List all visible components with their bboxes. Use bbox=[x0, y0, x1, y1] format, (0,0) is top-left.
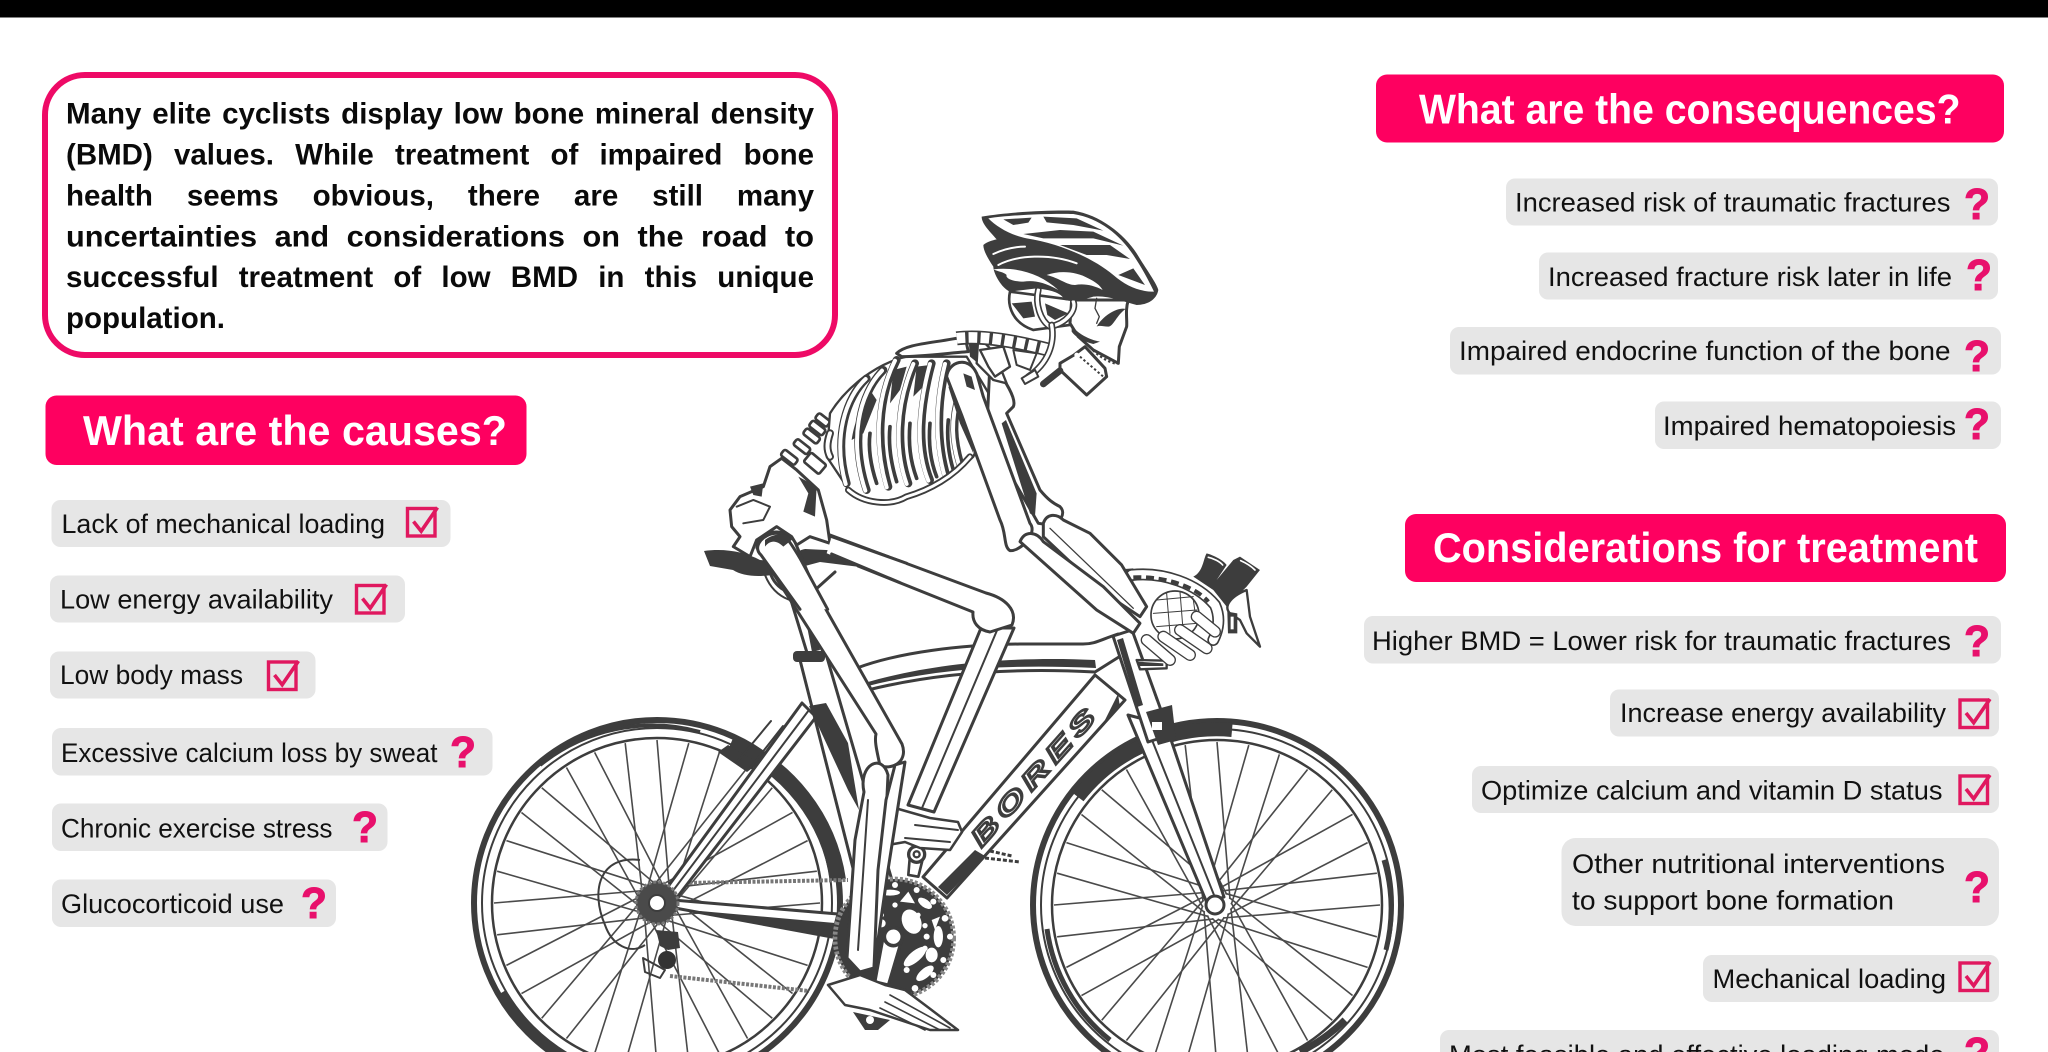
item: fracture risk later in life: ? bbox=[1966, 251, 1992, 300]
item: chronic exercise stress: Chronic exercise stress bbox=[61, 814, 332, 844]
helmet interior bbox=[1009, 292, 1073, 330]
far tibia bbox=[908, 628, 1014, 812]
head tube bbox=[1113, 630, 1170, 742]
top black bar bbox=[0, 0, 2048, 18]
rear wheel bbox=[474, 720, 840, 1052]
chain bbox=[670, 880, 848, 991]
near tibia and fibula bbox=[847, 763, 888, 972]
item: calcium and vitamin D bbox=[1472, 766, 1999, 813]
item: other nutritional interventions bbox=[1562, 838, 1999, 926]
skull bbox=[1060, 298, 1128, 395]
heading: consequences bbox=[1376, 74, 2004, 142]
pedal bbox=[853, 1012, 890, 1030]
far foot bbox=[888, 808, 962, 850]
helmet strap bbox=[1037, 290, 1074, 327]
item: calcium and vitamin D: Optimize calcium and vitamin D status bbox=[1481, 776, 1942, 806]
item: low body mass bbox=[50, 652, 316, 698]
heading: causes: What are the causes? bbox=[83, 407, 507, 454]
crank arm front bbox=[875, 937, 902, 985]
intro paragraph: Many elite cyclists display low bone mineral density bbox=[66, 98, 815, 130]
item: increase energy availability bbox=[1610, 690, 1999, 736]
item: hematopoiesis bbox=[1655, 400, 2001, 449]
forearm bones bbox=[1043, 515, 1147, 617]
intro text box bbox=[45, 75, 835, 355]
top tube bbox=[857, 634, 1130, 690]
item: higher BMD: Higher BMD = Lower risk for traumatic fractures bbox=[1372, 626, 1951, 656]
rear brake bbox=[718, 745, 759, 772]
item: low energy availability: Low energy availability bbox=[60, 584, 333, 614]
seat tube bbox=[800, 654, 905, 935]
down tube bbox=[923, 675, 1125, 898]
far femur bbox=[830, 535, 1013, 632]
stem and bar bbox=[1088, 568, 1133, 584]
jaw bbox=[1060, 347, 1107, 395]
item: fracture risk later in life bbox=[1539, 251, 1998, 300]
item: hematopoiesis: ? bbox=[1964, 400, 1990, 449]
far arm bbox=[987, 363, 1063, 525]
item: excessive calcium loss by sweat: Excessive calcium loss by sweat bbox=[61, 738, 438, 768]
pelvis bbox=[730, 458, 830, 557]
intro paragraph: population. bbox=[66, 302, 225, 335]
intro paragraph: health seems obvious, there are still many bbox=[66, 180, 815, 212]
intro paragraph: successful treatment of low BMD in this unique bbox=[66, 261, 814, 294]
heading: causes bbox=[46, 396, 526, 465]
item: traumatic fractures: Increased risk of traumatic fractures bbox=[1515, 188, 1950, 218]
item: glucocorticoid use bbox=[52, 879, 336, 928]
item: endocrine function bbox=[1450, 327, 2001, 381]
helmet shell bbox=[982, 211, 1158, 305]
crank arm rear bbox=[908, 855, 923, 877]
lumbar spine bbox=[780, 413, 831, 474]
chain stay bbox=[661, 899, 838, 937]
skeleton: handlebar, forearm and hand bbox=[1020, 515, 1260, 700]
near humerus bbox=[948, 387, 973, 453]
upper teeth bbox=[1090, 347, 1117, 364]
rib shadows bbox=[869, 420, 953, 483]
front wheel bbox=[1033, 721, 1401, 1052]
front brake bbox=[1146, 705, 1176, 745]
item: hematopoiesis: Impaired hematopoiesis bbox=[1663, 411, 1956, 441]
illustration: skeleton riding a bicycle bbox=[474, 211, 1401, 1052]
cervical spine bbox=[957, 337, 1050, 350]
item: traumatic fractures bbox=[1506, 178, 1998, 229]
item: other nutritional interventions: to support bone formation bbox=[1572, 886, 1894, 916]
hood and shifter bbox=[1193, 553, 1260, 607]
near femur bbox=[757, 532, 903, 767]
item: most feasible loading mode bbox=[1440, 1029, 1999, 1052]
item: lack of mechanical loading: Lack of mechanical loading bbox=[62, 509, 385, 539]
item: endocrine function: Impaired endocrine function of the bone bbox=[1459, 336, 1950, 366]
rib cage bbox=[827, 357, 997, 504]
item: other nutritional interventions: ? bbox=[1964, 863, 1990, 912]
item: increase energy availability: Increase energy availability bbox=[1620, 698, 1946, 728]
item: other nutritional interventions: Other nutritional interventions bbox=[1572, 849, 1945, 879]
item: low energy availability bbox=[50, 576, 405, 622]
skeleton: far leg bbox=[830, 535, 1020, 862]
costal cartilage bbox=[848, 457, 970, 502]
skeleton: near leg bbox=[757, 532, 958, 1030]
item: glucocorticoid use: ? bbox=[301, 879, 327, 928]
hand bones bbox=[1151, 591, 1199, 639]
skeleton: neck and head bbox=[957, 211, 1158, 395]
item: traumatic fractures: ? bbox=[1964, 180, 1990, 229]
saddle bbox=[704, 549, 860, 602]
item: chronic exercise stress: ? bbox=[352, 803, 378, 852]
item: glucocorticoid use: Glucocorticoid use bbox=[61, 889, 284, 919]
item: higher BMD bbox=[1364, 616, 2001, 666]
item: chronic exercise stress bbox=[52, 803, 388, 852]
seat stay bbox=[664, 703, 816, 900]
intro paragraph: uncertainties and considerations on the road to bbox=[66, 220, 814, 254]
heading: considerations bbox=[1405, 514, 2006, 582]
item: excessive calcium loss by sweat bbox=[52, 728, 492, 777]
panel: consequences bbox=[1376, 74, 2004, 449]
item: mechanical loading: Mechanical loading bbox=[1712, 964, 1946, 994]
fork bbox=[1128, 715, 1224, 903]
bar tape bbox=[1132, 574, 1218, 640]
chainring and cranks bbox=[835, 846, 954, 998]
item: higher BMD: ? bbox=[1964, 617, 1990, 666]
item: lack of mechanical loading bbox=[52, 500, 450, 547]
brand lettering: BORES bbox=[965, 699, 1106, 852]
skeleton: torso bbox=[730, 337, 1063, 609]
panel: causes bbox=[46, 396, 526, 928]
panel: considerations for treatment bbox=[1364, 514, 2006, 1052]
heading: considerations: Considerations for treatment bbox=[1433, 524, 1978, 571]
seat post and clamp bbox=[790, 592, 824, 656]
item: mechanical loading bbox=[1703, 955, 1999, 1002]
near foot bbox=[828, 975, 958, 1030]
intro paragraph: (BMD) values. While treatment of impaired bone bbox=[66, 138, 814, 172]
heading: consequences: What are the consequences? bbox=[1419, 86, 1960, 132]
item: low body mass: Low body mass bbox=[60, 660, 243, 690]
item: fracture risk later in life: Increased fracture risk later in life bbox=[1548, 262, 1952, 292]
item: endocrine function: ? bbox=[1964, 332, 1990, 381]
bicycle frame bbox=[661, 590, 1224, 937]
scapula and clavicle bbox=[897, 337, 968, 357]
near femur head over saddle bbox=[758, 533, 828, 609]
intro paragraph bbox=[66, 98, 815, 335]
item: excessive calcium loss by sweat: ? bbox=[450, 728, 476, 777]
far femur head link bbox=[827, 537, 907, 583]
rear cassette and derailleur bbox=[636, 882, 680, 978]
